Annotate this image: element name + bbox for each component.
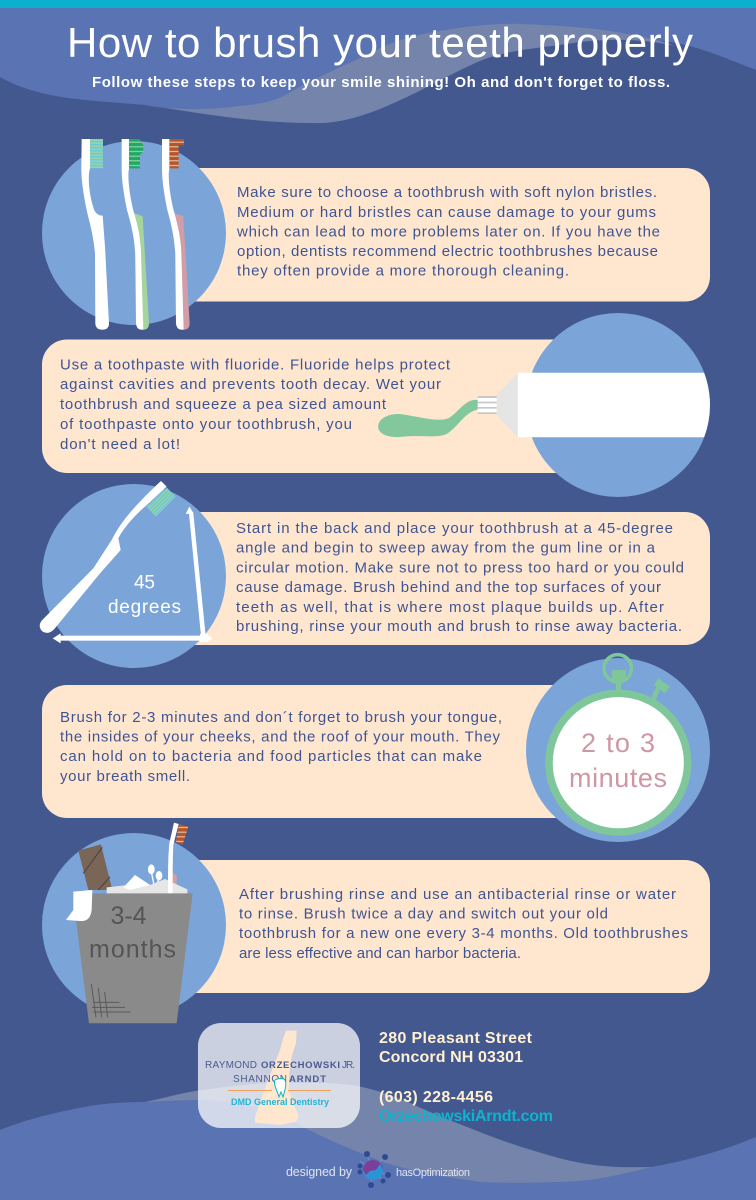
step 4 text [60,709,502,785]
step 3 circle [42,484,226,668]
step 5 text: After brushing rinse and use an antibacterial rinse or water [239,886,676,903]
designer credit [286,1151,470,1188]
designed by: designed by [286,1165,353,1179]
step 1 text: which can lead to more problems later on. If you have the [236,224,660,240]
dial [549,693,688,832]
step 4 text: can hold on to bacteria and food particles that can make [60,748,482,765]
icon: toothpaste tube [378,373,710,437]
stem [616,678,621,690]
panel: step 2 toothpaste [42,313,710,497]
step 5 text: to rinse. Brush twice a day and switch out your old [239,906,608,922]
logo panel [198,1023,360,1128]
address: Concord NH 03301 [379,1049,523,1066]
tube body [518,373,710,437]
toothbrush green [122,139,149,330]
step 2 circle [526,313,710,497]
step 5 text [239,886,688,962]
step 4 circle [526,658,710,842]
step 4 card [42,685,582,818]
bristles [147,487,176,517]
icon: trash can [66,823,193,1023]
cotton swabs [148,864,162,885]
label: 45 degrees [108,572,181,618]
step 3 text: Start in the back and place your toothbrush at a 45-degree [236,520,673,537]
step 2 text: toothbrush and squeeze a pea sized amount [60,396,387,413]
step 1 text: Medium or hard bristles can cause damage to your gums [237,204,656,221]
step 3 text [236,520,684,635]
small toothbrush [168,823,188,893]
step 2 text: don't need a lot! [60,436,180,453]
label: 3-4 months: months [89,936,176,964]
vertical arrow [186,507,206,636]
brush [40,481,167,633]
step 4 text: your breath smell. [60,768,190,785]
icon: stopwatch [549,655,688,832]
subtitle: Follow these steps to keep your smile shining! Oh and don't forget to floss. [92,74,670,91]
side button [651,678,670,700]
step 2 text [60,356,451,453]
can [73,893,193,1023]
label: 3-4 months [89,902,176,964]
step 4 text: Brush for 2-3 minutes and don´t forget to brush your tongue, [60,709,502,726]
step 1 text: Make sure to choose a toothbrush with soft nylon bristles. [237,184,657,201]
step 2 card [42,340,582,473]
step 2 text: Use a toothpaste with fluoride. Fluoride helps protect [60,356,451,374]
logo divider [228,1090,331,1091]
address: 280 Pleasant Street [379,1030,533,1047]
logo names: RAYMOND [205,1060,257,1071]
website: OrzechowskiArndt.com [379,1108,553,1125]
bottom wave [0,1083,756,1200]
label: 45 degrees: degrees [108,597,181,618]
panel: step 3 45 degree angle [40,481,710,668]
panel: step 5 replace toothbrush [42,823,710,1023]
toothpaste squeeze [378,400,478,437]
label: 3-4 months: 3-4 [110,902,147,930]
tube shoulder [497,373,518,437]
logo card [198,1023,360,1128]
logo names: SHANNON [233,1074,287,1085]
address [379,1030,533,1066]
step 5 card [170,860,710,993]
step 1 text: option, dentists recommend electric toothbrushes because [237,243,658,260]
step 3 text: angle and begin to sweep away from the gum line or in a [236,540,656,556]
step 2 text: against cavities and prevents tooth decay. Wet your [60,376,441,393]
step 3 text: teeth as well, that is where most plaque builds up. After [236,599,664,616]
top ring [604,655,631,682]
panel: step 1 choose a toothbrush [42,139,710,330]
logo tagline: DMD General Dentistry [231,1097,329,1107]
icon: angled toothbrush with arrows [40,481,212,643]
icon: three toothbrushes [81,139,190,330]
horizontal arrow [53,633,212,643]
icon: hasOptimization logo [358,1151,391,1188]
step 3 text: cause damage. Brush behind and the top surfaces of your [236,579,661,596]
crown [612,670,626,681]
step 3 card [170,512,710,645]
label: 2 to 3 minutes: minutes [569,763,667,793]
chocolate wrapper [78,844,112,890]
label: 2 to 3 minutes: 2 to 3 [581,728,655,758]
top wave [0,0,756,123]
tissue [66,890,92,921]
step 5 circle [42,833,226,1017]
step 3 text: circular motion. Make sure not to press too hard or you could [236,560,684,576]
step 3 text: brushing, rinse your mouth and brush to rinse away bacteria. [236,618,682,635]
phone: (603) 228-4456 [379,1089,493,1106]
step 1 text [236,184,660,280]
logo names: ARNDT [289,1074,326,1085]
step 4 text: the insides of your cheeks, and the roof of your mouth. They [60,728,501,746]
New Hampshire map [255,1031,298,1125]
step 5 text: are less effective and can harbor bacteria. [239,945,521,962]
toothbrush pink [162,139,190,330]
icon: tooth [274,1078,286,1097]
title: How to brush your teeth properly [67,19,693,66]
label: 2 to 3 minutes [569,728,667,793]
paper [107,875,187,894]
hasOptimization: hasOptimization [396,1167,470,1179]
logo names: ORZECHOWSKI [261,1060,340,1071]
step 2 text: of toothpaste onto your toothbrush, you [60,416,352,433]
tube cap [478,396,497,414]
label: 45 degrees: 45 [134,572,155,594]
contact details [379,1030,553,1125]
step 1 circle [42,141,226,325]
panel: step 4 brushing time [42,655,710,842]
scratch marks [91,984,131,1017]
logo names [205,1060,355,1085]
pink brush handle [172,872,177,893]
toothbrush white [81,139,109,330]
step 1 text: they often provide a more thorough cleaning. [237,262,569,280]
logo names: JR. [342,1060,355,1071]
step 1 card [170,168,710,302]
top accent bar [0,0,756,8]
step 5 text: toothbrush for a new one every 3-4 months. Old toothbrushes [239,925,688,942]
